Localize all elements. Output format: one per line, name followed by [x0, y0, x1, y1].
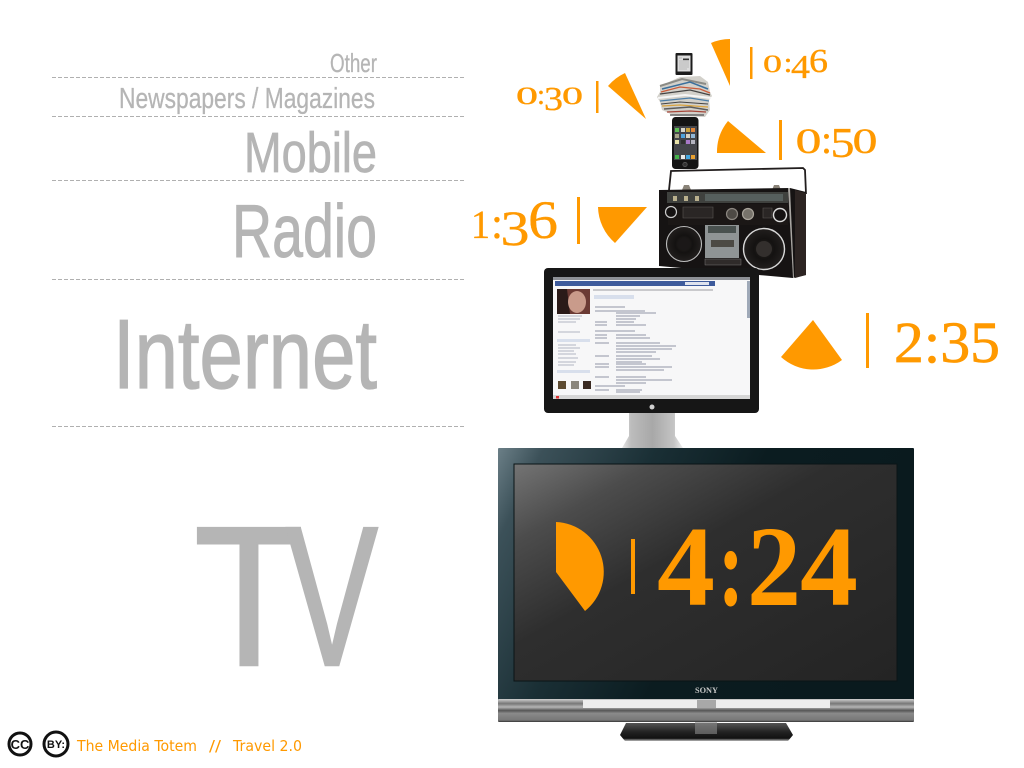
icon: attribution	[44, 732, 68, 756]
time: other: :	[784, 48, 792, 79]
monitor body	[544, 268, 759, 413]
icon: flat-screen television	[498, 448, 914, 741]
time: tv: 4	[800, 503, 858, 630]
tv bezel	[498, 448, 914, 700]
time: newspapers: 0	[516, 83, 538, 110]
footer credit: The Media Totem	[76, 737, 197, 755]
label: TV: T	[194, 486, 304, 708]
tv lower band	[498, 699, 914, 722]
time: other	[711, 39, 828, 86]
time: tv: 2	[747, 503, 801, 630]
time: mobile	[717, 117, 878, 167]
time: radio: 1	[471, 202, 490, 247]
icon: stack of newspapers	[657, 76, 712, 117]
time: newspapers: 3	[544, 81, 563, 118]
footer credit: Travel 2.0	[232, 737, 302, 755]
time: other: 0	[763, 51, 782, 78]
icon: e-reader	[676, 53, 692, 75]
time: tv	[556, 503, 858, 630]
time: internet	[781, 310, 1000, 375]
icon: creative commons: CC	[11, 737, 30, 752]
label: Internet: Internet	[113, 299, 377, 409]
icon: boombox radio	[659, 168, 806, 278]
time: newspapers	[516, 73, 646, 119]
icon: attribution: BY:	[47, 739, 65, 751]
monitor screen	[553, 277, 750, 399]
footer credit	[76, 737, 302, 755]
footer credit: //	[209, 737, 222, 755]
tv screen	[514, 464, 897, 681]
monitor stand	[622, 413, 683, 448]
icon: desktop monitor with web page	[544, 268, 759, 448]
time: newspapers: 0	[562, 83, 583, 110]
icon: creative commons	[9, 733, 31, 755]
tv logo: SONY	[695, 686, 718, 695]
divider lines	[52, 78, 464, 426]
time: radio: :	[491, 199, 503, 248]
icon: smartphone	[672, 117, 698, 169]
time: mobile: 5	[830, 121, 854, 167]
time: radio	[471, 190, 647, 256]
time: mobile: 0	[852, 121, 878, 161]
apple logo	[650, 404, 654, 410]
time: internet: 2:35	[894, 310, 1000, 375]
label: TV: V	[286, 486, 378, 708]
label: Radio: Radio	[232, 189, 377, 273]
label: Other: Other	[330, 48, 377, 78]
time: tv: :	[718, 503, 744, 630]
label: Mobile: Mobile	[244, 121, 377, 185]
time: other: 4	[791, 49, 810, 86]
time: radio: 3	[500, 200, 530, 256]
time: tv: 4	[657, 503, 715, 630]
time: mobile: 0	[796, 121, 822, 161]
label: Newspapers / Magazines: Newspapers / Magazines	[119, 83, 375, 115]
time: other: 6	[809, 43, 828, 80]
time: mobile: :	[821, 117, 832, 162]
tv stand base	[620, 723, 793, 741]
time: newspapers: :	[537, 80, 545, 111]
time: radio: 6	[528, 190, 558, 250]
